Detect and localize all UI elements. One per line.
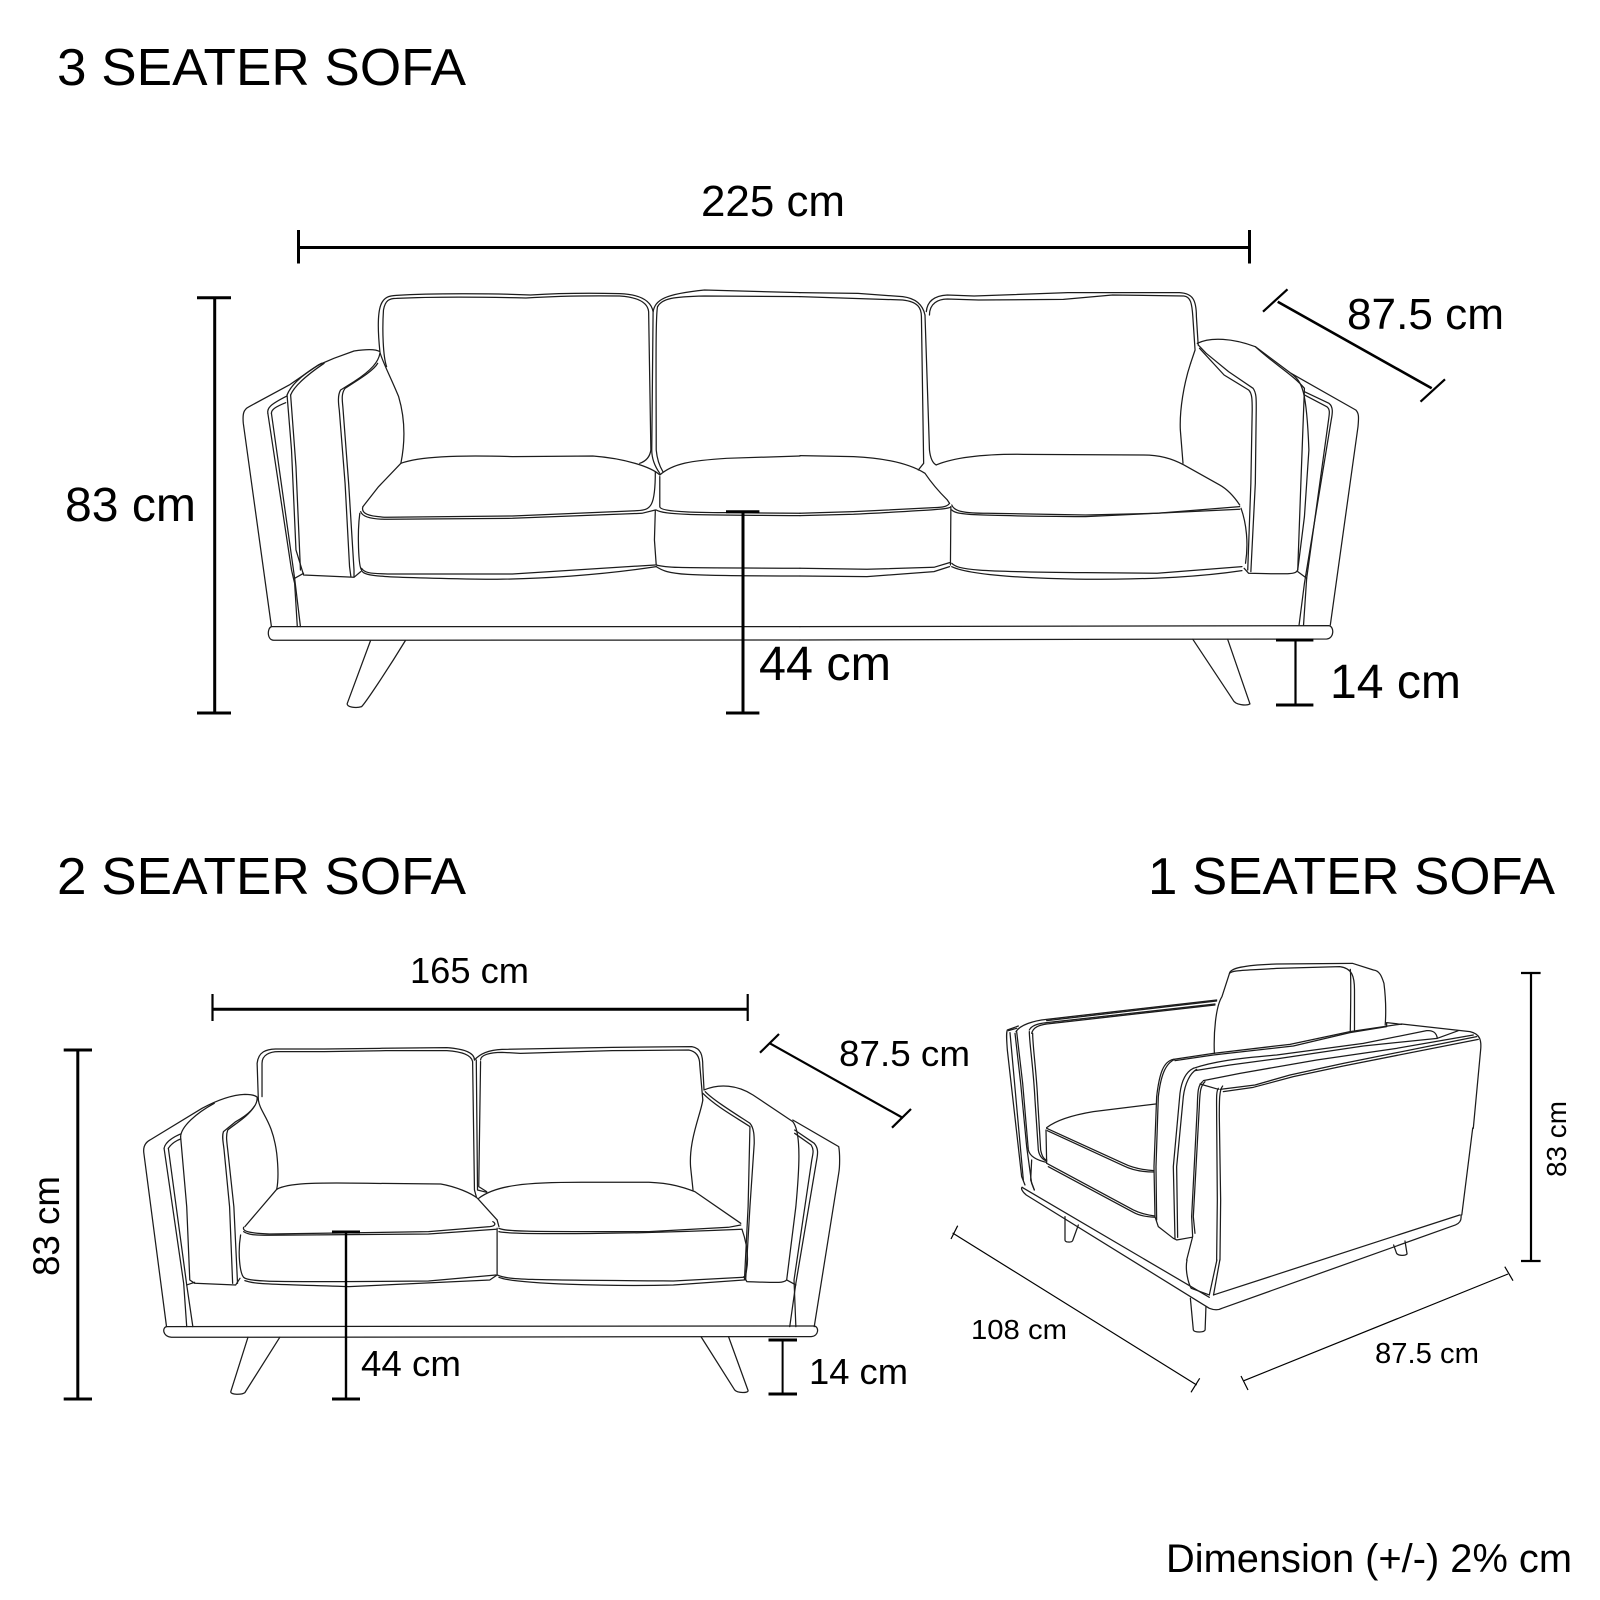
dimension: height 83 cm: 83 cm [26,1176,67,1276]
dimension: seat height 44 cm: 44 cm [759,638,891,691]
heading: 3 seater sofa: 3 SEATER SOFA [57,39,466,97]
dimension: depth 87.5 cm: 87.5 cm [1347,290,1504,339]
dimension: depth 87.5 cm [1263,289,1504,402]
dimension: leg height 14 cm: 14 cm [1330,656,1461,709]
dimension: leg height 14 cm: 14 cm [809,1351,908,1392]
dimension: depth 87.5 cm [760,1033,970,1128]
dimension: depth 87.5 cm: 87.5 cm [1375,1338,1479,1370]
dimension: depth 87.5 cm [1241,1267,1513,1390]
dimension: height 83 cm: 83 cm [65,479,196,532]
dimension: leg height 14 cm [768,1340,908,1394]
drawing: 2 seater sofa front view [144,1047,840,1394]
dimension: width 165 cm: 165 cm [410,950,529,991]
note: dimension tolerance: Dimension (+/-) 2% cm [1166,1537,1572,1581]
dimension: height 83 cm: 83 cm [1541,1101,1572,1177]
dimension: seat height 44 cm: 44 cm [361,1343,461,1384]
drawing: 3 seater sofa front view [243,290,1359,707]
dimension: length 108 cm [951,1226,1200,1392]
panel: 1 seater sofa [951,848,1572,1392]
heading: 1 seater sofa: 1 SEATER SOFA [1148,848,1555,906]
dimension: depth 87.5 cm: 87.5 cm [839,1033,970,1074]
panel: 2 seater sofa [26,848,970,1399]
dimension: length 108 cm: 108 cm [971,1314,1067,1345]
heading: 2 seater sofa: 2 SEATER SOFA [57,848,466,906]
panel: 3 seater sofa [57,39,1504,713]
drawing: 1 seater sofa angled view [1007,963,1481,1332]
dimension: width 225 cm: 225 cm [701,177,845,226]
